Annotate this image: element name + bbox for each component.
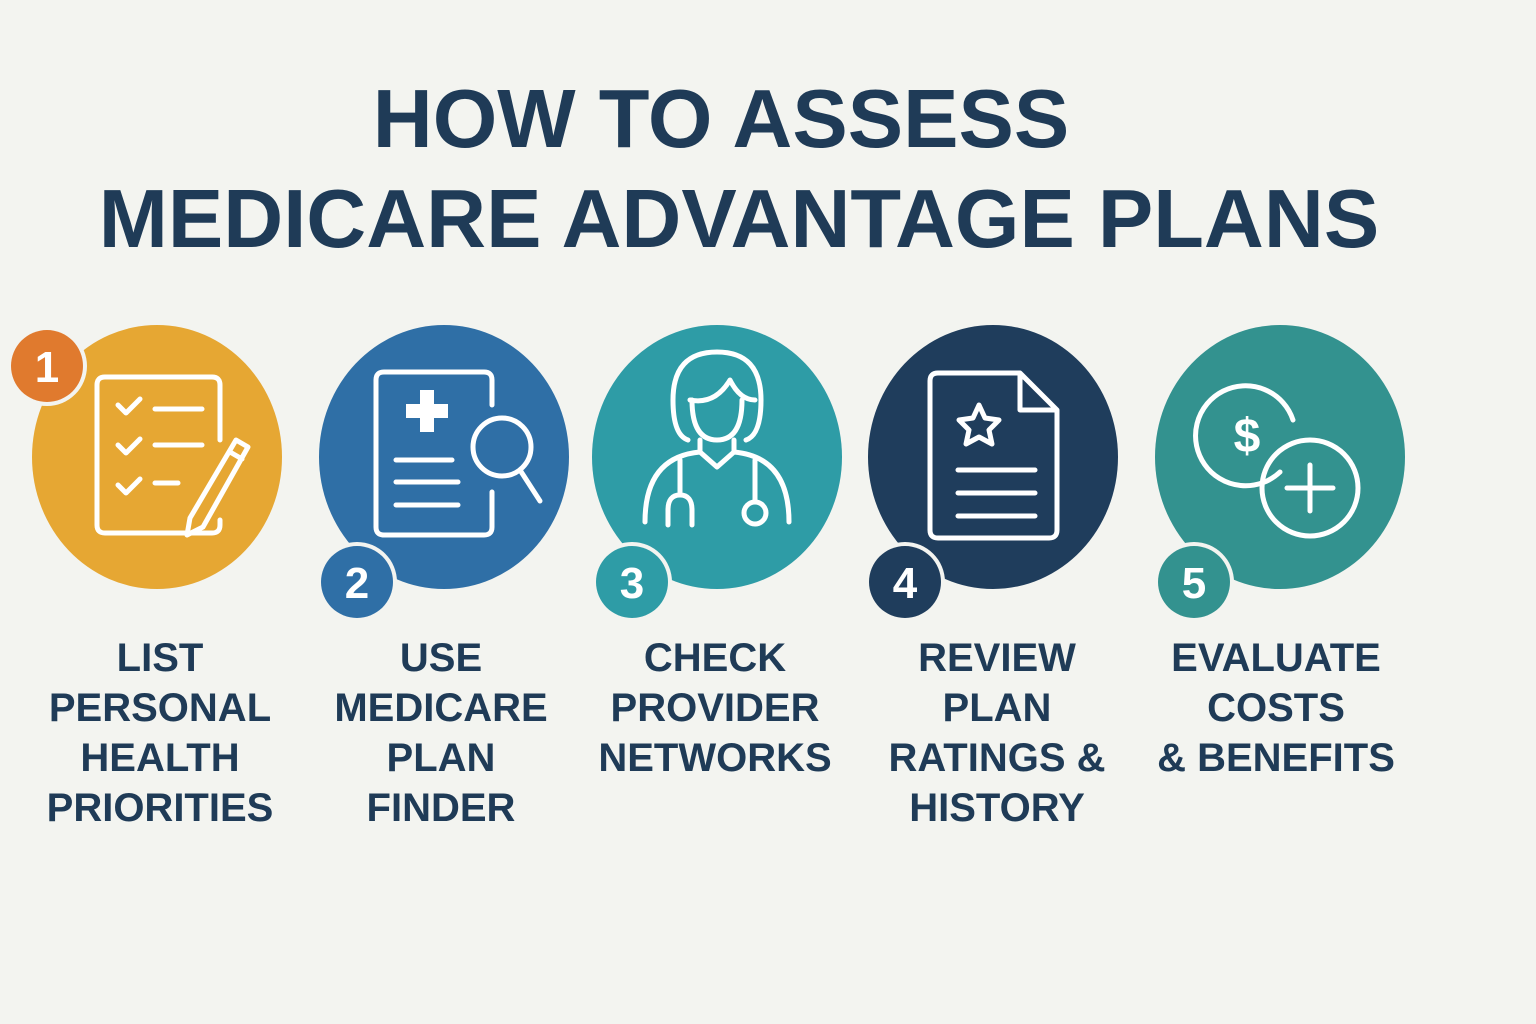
label 5 — [1157, 636, 1395, 780]
badge 3 — [592, 542, 672, 622]
label 3: CHECK — [644, 636, 786, 680]
label 1: PRIORITIES — [47, 786, 273, 830]
label 2: PLAN — [387, 736, 495, 780]
badge 2 — [317, 542, 397, 622]
step 5 circle: costs: $ — [1234, 410, 1261, 463]
label 2 — [334, 636, 548, 830]
step 2 circle: plan finder — [319, 325, 569, 589]
label 1: HEALTH — [80, 736, 240, 780]
label 4: RATINGS & — [888, 736, 1106, 780]
step 4 circle: ratings document — [868, 325, 1118, 589]
label 3: NETWORKS — [598, 736, 832, 780]
label 2: FINDER — [367, 786, 515, 830]
badge 1: 1 — [35, 343, 59, 392]
step 1 circle: checklist — [32, 325, 282, 589]
title: MEDICARE ADVANTAGE PLANS — [99, 172, 1379, 265]
badge 4 — [865, 542, 945, 622]
label 1: LIST — [117, 636, 203, 680]
step 5 circle: costs — [1155, 325, 1405, 589]
icons row — [11, 325, 1405, 618]
label 5: COSTS — [1207, 686, 1345, 730]
badge 1 — [7, 326, 87, 406]
label 1: PERSONAL — [49, 686, 271, 730]
step 3 circle: provider — [592, 325, 842, 589]
label 4 — [888, 636, 1106, 830]
badge 2: 2 — [345, 559, 369, 608]
badge 4: 4 — [893, 559, 918, 608]
badge 5 — [1154, 542, 1234, 622]
badge 5: 5 — [1182, 559, 1206, 608]
label 5: & BENEFITS — [1157, 736, 1395, 780]
label 4: HISTORY — [909, 786, 1085, 830]
label 5: EVALUATE — [1171, 636, 1381, 680]
label 2: MEDICARE — [334, 686, 548, 730]
label 4: PLAN — [943, 686, 1051, 730]
label 1 — [47, 636, 273, 830]
label 2: USE — [400, 636, 482, 680]
label 3: PROVIDER — [611, 686, 819, 730]
badge 3: 3 — [620, 559, 644, 608]
label 4: REVIEW — [918, 636, 1076, 680]
label 3 — [598, 636, 832, 780]
title — [99, 72, 1379, 265]
title: HOW TO ASSESS — [373, 72, 1069, 165]
